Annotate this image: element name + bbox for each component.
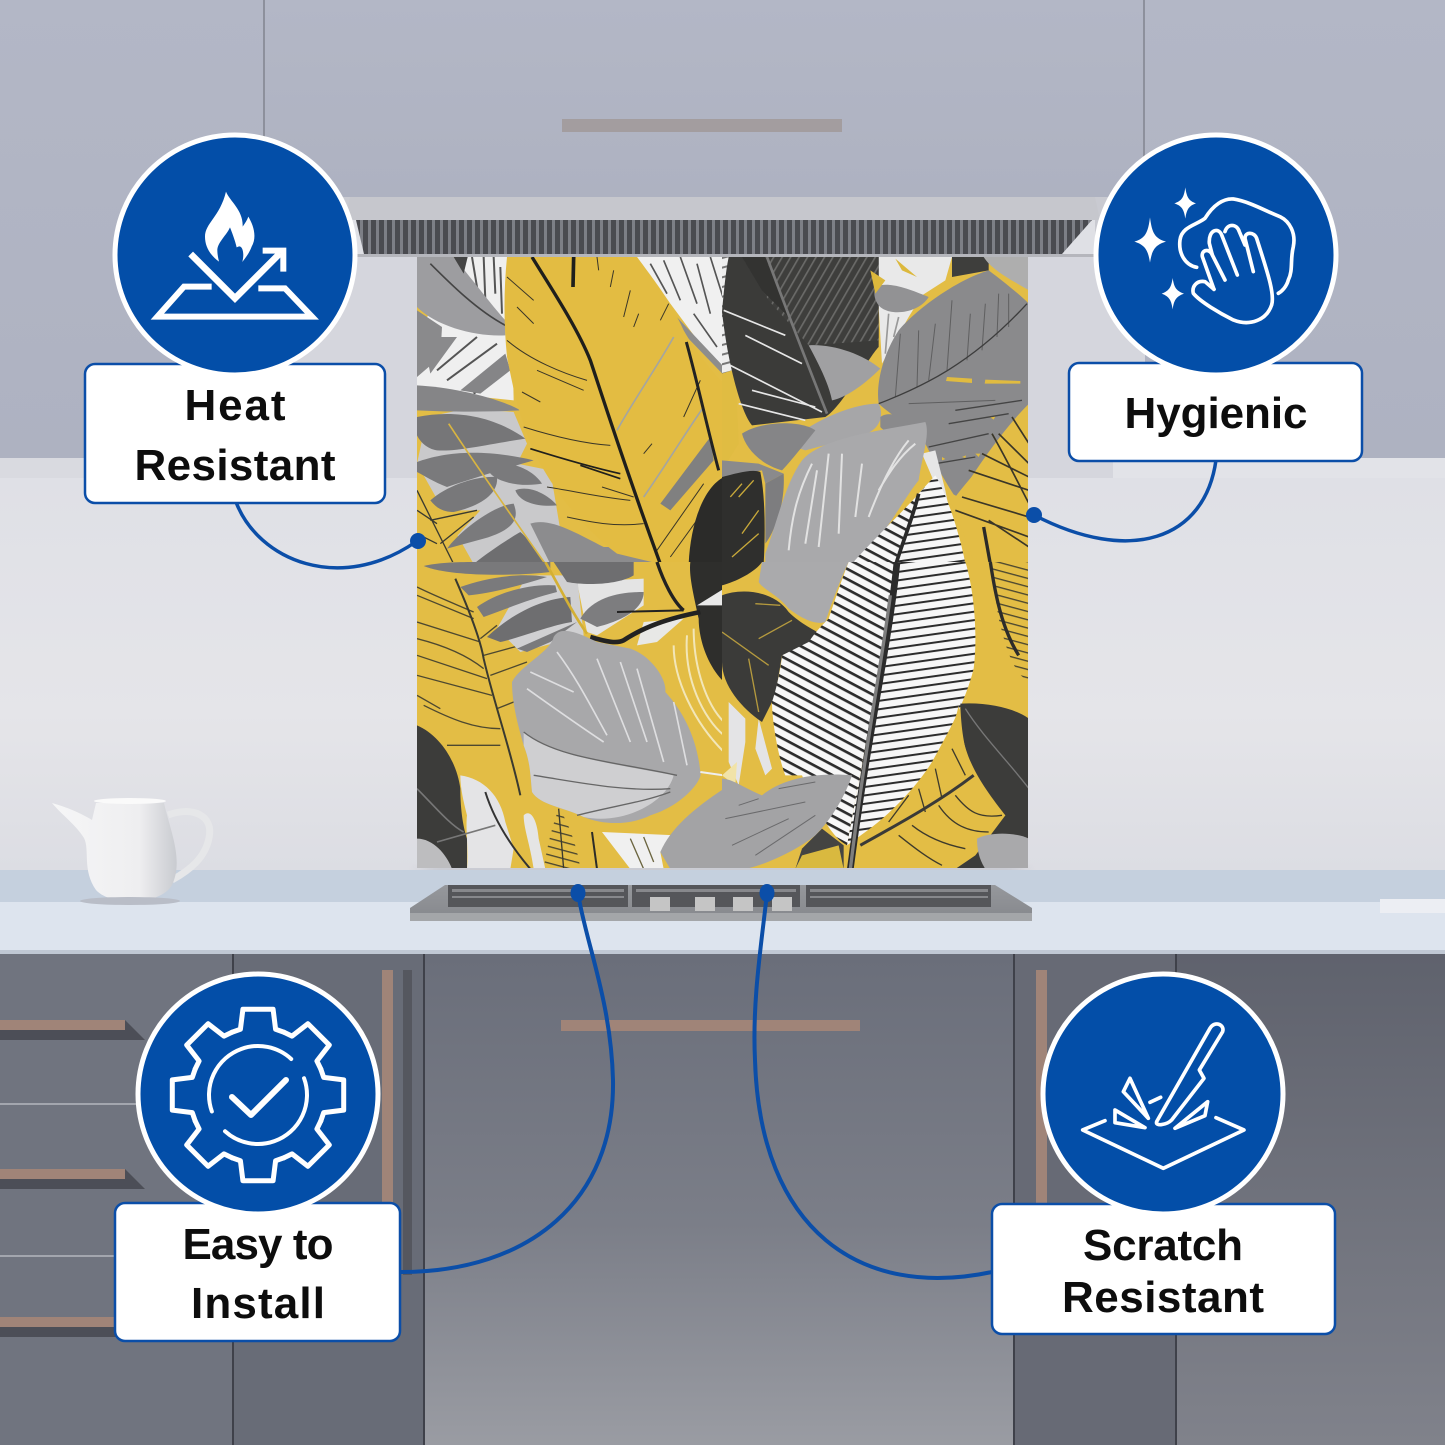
panel shadow xyxy=(425,866,1020,880)
grey big leaf xyxy=(878,270,1029,497)
label box: scratch resistant xyxy=(992,1204,1335,1334)
label box: scratch resistant: Resistant xyxy=(1062,1273,1264,1322)
cooktop xyxy=(410,885,1032,921)
kettle xyxy=(52,798,210,905)
wall xyxy=(0,478,1445,870)
base cabinets xyxy=(0,954,1445,1445)
label box: heat resistant: Resistant xyxy=(134,441,336,490)
label box: hygienic xyxy=(1069,363,1362,461)
extractor hood xyxy=(345,197,1100,257)
white leaf halves xyxy=(847,562,975,845)
handles xyxy=(0,1020,145,1040)
dark bottom-left patch xyxy=(722,471,765,564)
icon: gear with check xyxy=(138,974,378,1214)
label box: scratch resistant: Scratch xyxy=(1083,1221,1243,1270)
label box: heat resistant: Heat xyxy=(184,381,286,430)
silver leaf xyxy=(512,631,701,823)
icon: knife scratching a surface xyxy=(1043,974,1283,1214)
white leaf top, left half xyxy=(854,478,932,562)
callout: easy to install xyxy=(115,974,400,1341)
icon: wiping hand and sparkles xyxy=(1096,135,1336,375)
label box: easy to install: Install xyxy=(191,1279,325,1328)
right feather xyxy=(992,562,1029,682)
splashback panel: tropical leaves xyxy=(417,257,1029,869)
connector: scratch resistant xyxy=(754,884,992,1278)
label box: easy to install xyxy=(115,1203,400,1341)
callout: heat resistant xyxy=(85,135,385,503)
callout: hygienic xyxy=(1069,135,1362,461)
label box: easy to install: Easy to xyxy=(182,1220,334,1269)
connector: hygienic xyxy=(1026,460,1216,541)
dark leaf xyxy=(722,562,762,585)
right yellow feather xyxy=(954,404,1028,497)
main yellow leaf xyxy=(504,257,689,562)
label box: heat resistant xyxy=(85,364,385,503)
yellow leaf xyxy=(955,706,1006,816)
top handle xyxy=(562,119,842,132)
bottom grey leaf xyxy=(795,829,844,869)
panel top-left: yellow leaf and fern xyxy=(417,257,724,564)
connector: heat resistant xyxy=(236,502,426,568)
top grey leaf xyxy=(759,562,849,623)
dark right leaf xyxy=(955,703,1029,869)
panel top-right: dark and grey leaves xyxy=(722,257,1029,564)
counter top xyxy=(0,870,1445,954)
icon: flame on surface xyxy=(115,135,355,375)
mid greys xyxy=(800,404,882,450)
callout: scratch resistant xyxy=(992,974,1335,1334)
connector: easy to install xyxy=(401,884,613,1272)
label box: hygienic: Hygienic xyxy=(1124,389,1308,438)
panel bottom-left: feather and silver leaf xyxy=(417,562,724,869)
upper cabinets xyxy=(0,0,1445,458)
panel bottom-right: white striped leaf xyxy=(722,562,1029,869)
lower details xyxy=(602,832,670,868)
white leaf top, right half xyxy=(896,475,965,564)
